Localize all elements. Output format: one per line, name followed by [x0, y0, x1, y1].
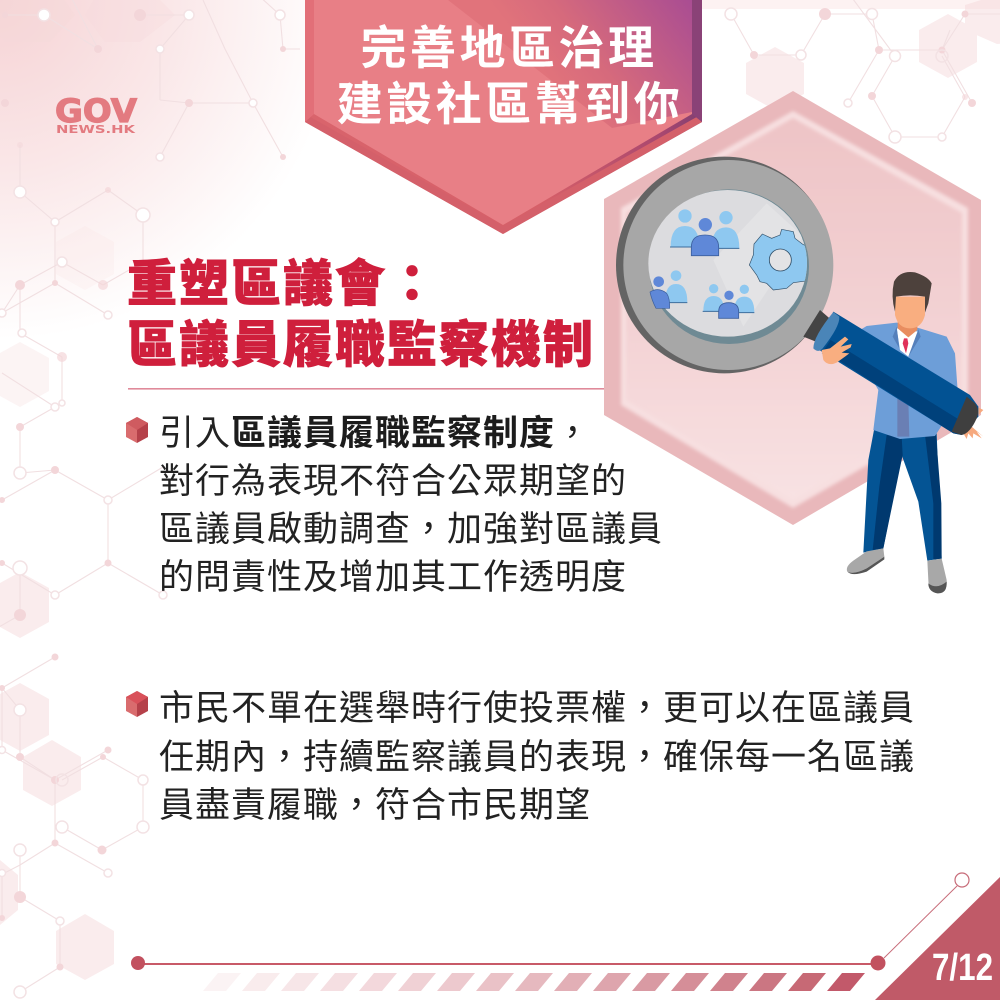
top right tint	[700, 0, 1000, 9]
bullet text 1	[126, 414, 663, 597]
man: tie lower	[897, 393, 909, 437]
paragraph 1: 對行為表現不符合公眾期望的	[159, 462, 627, 501]
banner heading line 2: 建設社區幫到你	[337, 78, 683, 130]
magnifier: gear icon	[749, 229, 813, 290]
section heading	[127, 256, 595, 373]
man: jacket	[822, 323, 958, 439]
page number tag	[875, 877, 1000, 1000]
bullet text 2	[126, 689, 915, 825]
paragraph 1: 的問責性及增加其工作透明度	[159, 558, 627, 597]
magnifier: handle	[813, 312, 978, 435]
banner heading line 1: 完善地區治理	[360, 22, 658, 74]
paragraph 2: 市民不單在選舉時行使投票權，更可以在區議員	[159, 689, 915, 728]
man: far hand	[963, 407, 983, 439]
icon: cube bullet 2	[126, 691, 148, 717]
magnifier: people group left	[650, 270, 687, 308]
man: near hand	[822, 337, 852, 364]
heading line 1: 重塑區議會：	[127, 256, 439, 312]
paragraph 1: 區議員啟動調查，加強對區議員	[159, 510, 663, 549]
illustration backdrop hexagon	[604, 91, 981, 525]
magnifier: neck	[803, 310, 833, 344]
logo: GOV News.hk: NEWS.HK	[56, 124, 136, 136]
man: hair	[893, 272, 932, 313]
illustration: man holding magnifying glass	[616, 157, 983, 593]
logo: GOV News.hk: GOV	[55, 92, 137, 130]
horizontal rule	[128, 388, 604, 390]
heading line 2: 區議員履職監察機制	[127, 317, 595, 373]
man: shoes	[847, 548, 947, 593]
icon: cube bullet 1	[126, 417, 148, 443]
man: shirt and tie	[893, 327, 921, 357]
paragraph 2: 員盡責履職，符合市民期望	[159, 786, 591, 825]
man: neck and face	[895, 297, 925, 337]
magnifier: outer ring	[616, 157, 833, 373]
paragraph 2: 任期內，持續監察議員的表現，確保每一名區議	[159, 738, 915, 777]
corner gradient	[0, 0, 340, 340]
paragraph 1: 引入	[159, 414, 231, 453]
footer timeline	[131, 873, 969, 970]
footer gradient stripes	[203, 973, 865, 991]
magnifier: people group bottom	[703, 284, 754, 318]
paragraph 1: 區議員履職監察制度，	[231, 414, 591, 453]
man: legs	[863, 430, 942, 561]
magnifier: people group top	[670, 209, 739, 256]
title banner	[305, 0, 702, 234]
